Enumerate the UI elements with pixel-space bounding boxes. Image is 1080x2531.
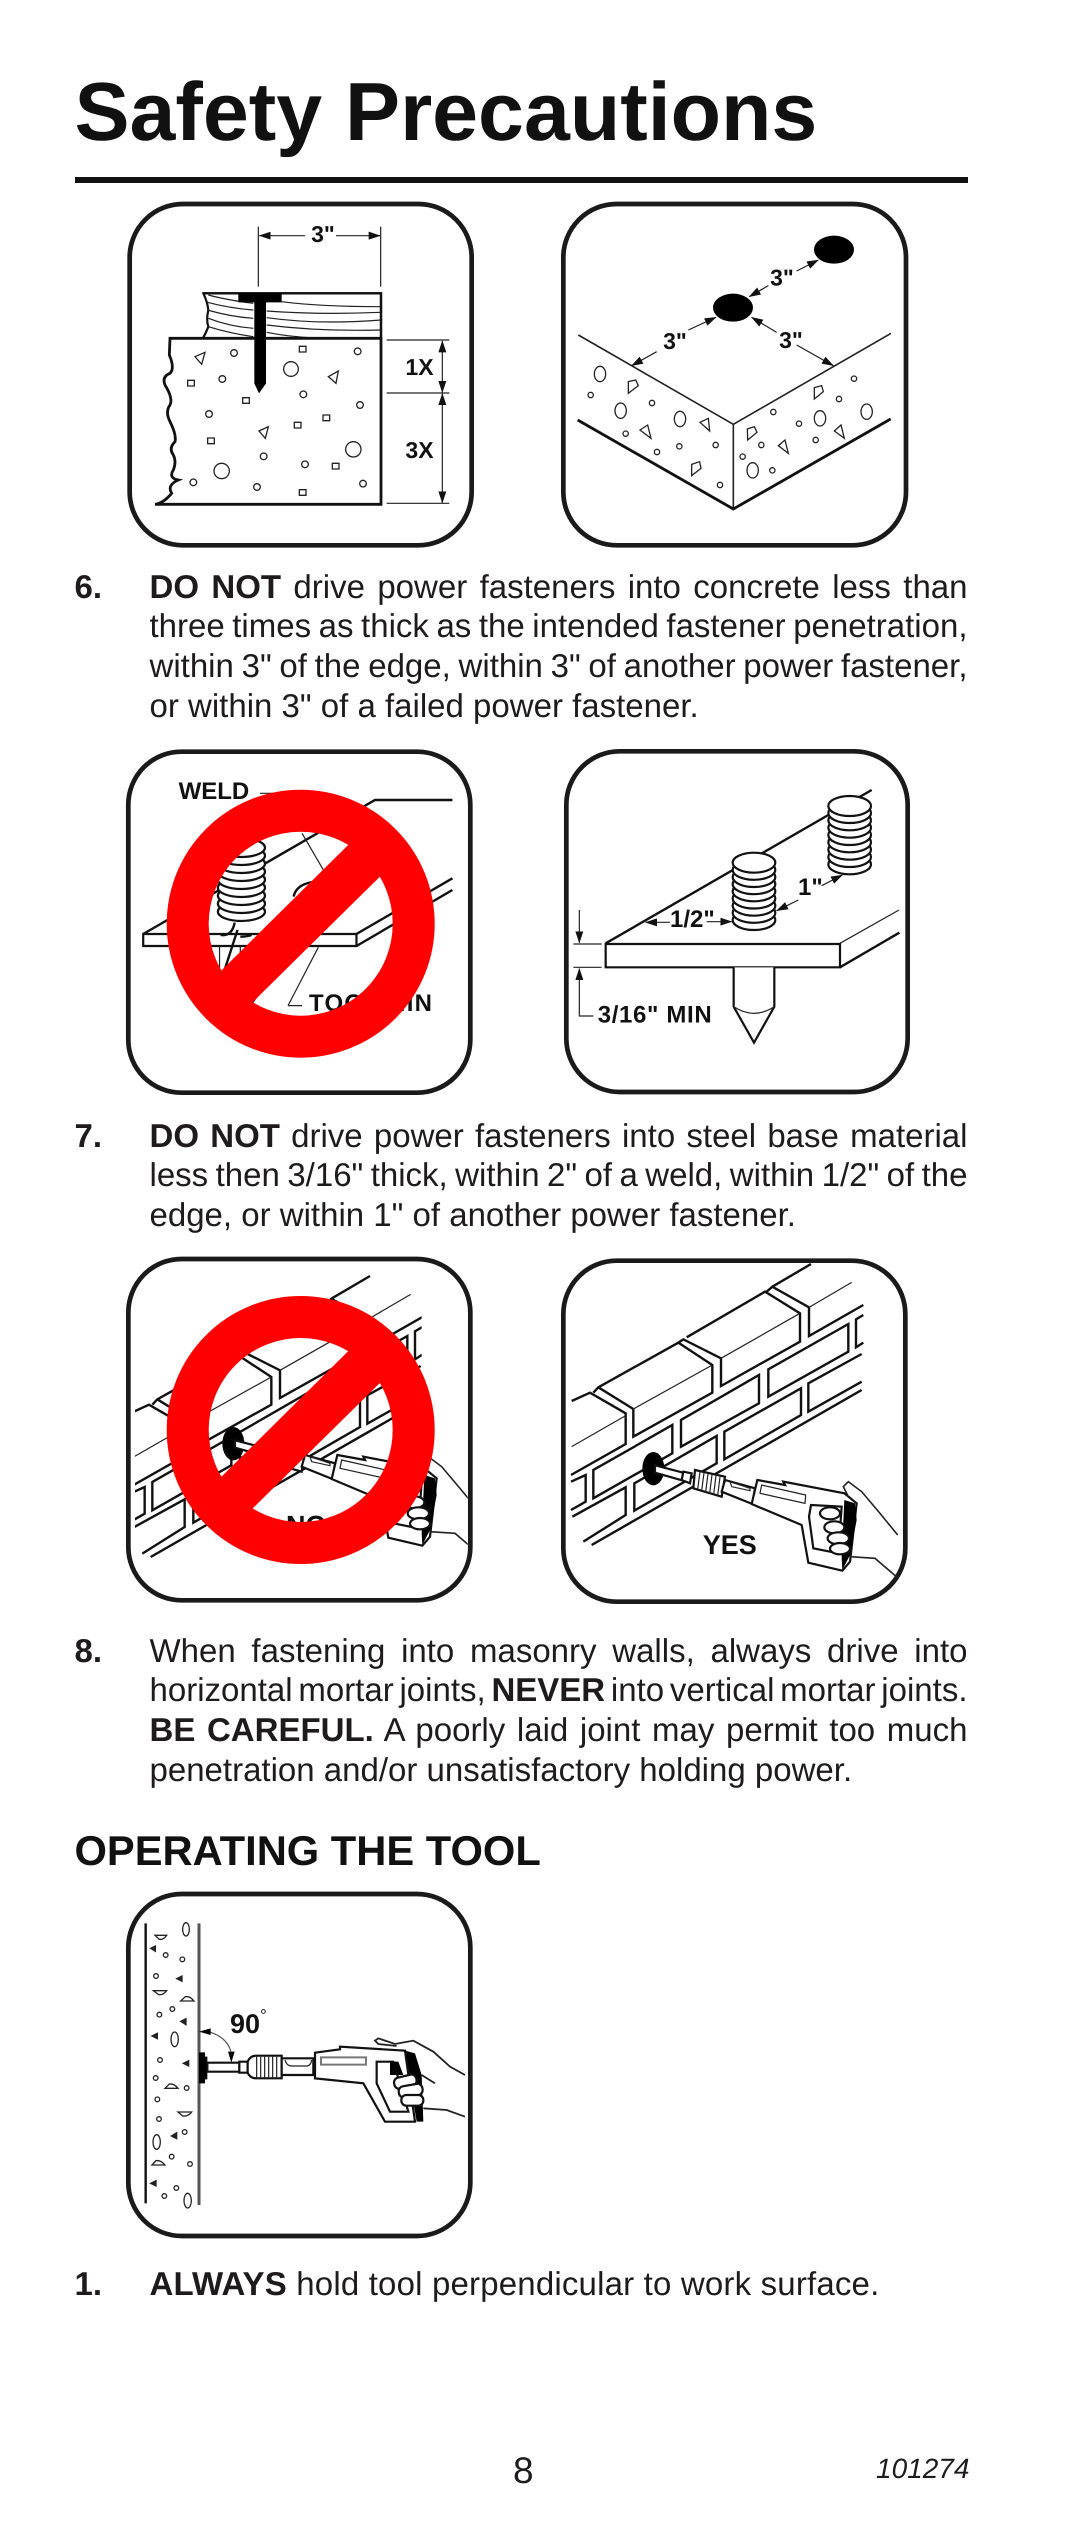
text: item 6	[74, 568, 968, 724]
panel: concrete edge spacing diagram	[561, 202, 908, 548]
text: item 7	[74, 1117, 968, 1233]
text: 6.	[74, 568, 102, 605]
dimension labels: 3"	[779, 327, 803, 353]
dimension labels: 3"	[311, 221, 335, 247]
text: BE CAREFUL. A poorly laid joint may permit too much	[150, 1711, 967, 1748]
text: or within 3" of a failed power fastener.	[150, 687, 699, 724]
dimension labels: 1/2"	[670, 906, 715, 933]
heading: operating the tool: OPERATING THE TOOL	[74, 1827, 541, 1874]
dimension labels: 3"	[663, 328, 687, 354]
title: Safety Precautions	[74, 66, 817, 158]
icon: prohibition sign	[188, 811, 414, 1037]
dimension labels: 1X	[405, 354, 434, 380]
icon: prohibition sign	[188, 1317, 414, 1543]
panel: concrete thickness diagram	[127, 202, 474, 548]
dimension labels	[598, 874, 823, 1028]
panel: tool perpendicular to surface	[126, 1892, 473, 2238]
panel: prohibited steel base fastening	[126, 749, 473, 1095]
text: item 1	[74, 2265, 879, 2302]
panel: prohibited vertical joint fastening	[126, 1256, 473, 1603]
page number: 8	[513, 2450, 534, 2491]
text: 1.	[74, 2265, 102, 2302]
labels	[179, 778, 432, 1017]
text: penetration and/or unsatisfactory holding power.	[150, 1751, 852, 1788]
dimension labels: 3"	[770, 264, 794, 290]
dimension labels	[663, 264, 803, 354]
label: 90 degrees: 90	[230, 2009, 260, 2039]
label: NO: NO	[286, 1511, 326, 1541]
text: horizontal mortar joints, NEVER into vertical mortar joints.	[150, 1671, 968, 1708]
text: edge, or within 1" of another power fastener.	[150, 1196, 796, 1233]
label: 90 degrees: °	[260, 2006, 267, 2025]
text: When fastening into masonry walls, always drive into	[150, 1632, 968, 1669]
panel: correct steel base fastening	[564, 749, 910, 1094]
dimension labels: 1"	[798, 874, 823, 901]
text: ALWAYS hold tool perpendicular to work surface.	[150, 2265, 879, 2302]
text: 8.	[74, 1632, 102, 1669]
panel: correct horizontal joint fastening	[561, 1258, 908, 1604]
text: three times as thick as the intended fastener penetration,	[150, 607, 968, 644]
text: less then 3/16" thick, within 2" of a weld, within 1/2" of the	[150, 1156, 968, 1193]
dimension labels	[311, 221, 434, 463]
dimension labels: 3X	[405, 437, 434, 463]
text: within 3" of the edge, within 3" of another power fastener,	[150, 647, 968, 684]
labels: WELD	[179, 778, 249, 805]
text: item 8	[74, 1632, 968, 1788]
text: DO NOT drive power fasteners into steel base material	[150, 1117, 968, 1154]
label: YES: YES	[703, 1530, 757, 1560]
text: DO NOT drive power fasteners into concrete less than	[150, 568, 968, 605]
document code: 101274	[876, 2453, 969, 2484]
title rule	[74, 177, 968, 183]
labels: TOO THIN	[309, 990, 432, 1017]
text: 7.	[74, 1117, 102, 1154]
dimension labels: 3/16" MIN	[598, 1001, 712, 1028]
icon: fastener	[238, 293, 282, 393]
